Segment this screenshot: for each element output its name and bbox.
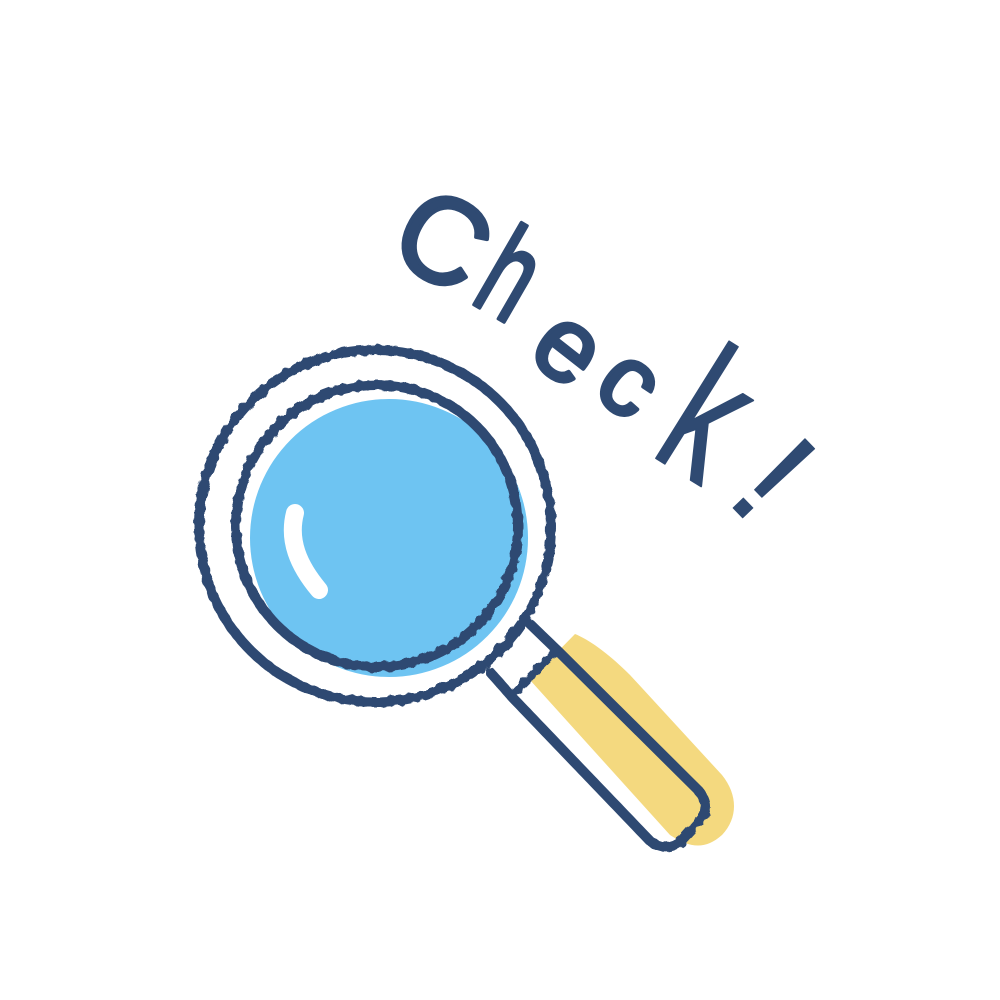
- heading: Check!: c: [577, 322, 685, 441]
- icon: yellow handle colour: [530, 634, 734, 846]
- icon: blue lens colour: [250, 399, 528, 677]
- heading: Check!: [371, 159, 846, 549]
- heading: Check!: k: [627, 308, 793, 521]
- icon: handle outline: [490, 624, 706, 847]
- icon: magnifier rims: [199, 350, 551, 702]
- heading: Check!: C: [371, 159, 514, 320]
- heading: Check!: !: [702, 408, 846, 549]
- heading: Check!: h: [454, 201, 567, 349]
- heading: Check!: e: [511, 282, 629, 410]
- icon: lens highlight: [293, 513, 319, 590]
